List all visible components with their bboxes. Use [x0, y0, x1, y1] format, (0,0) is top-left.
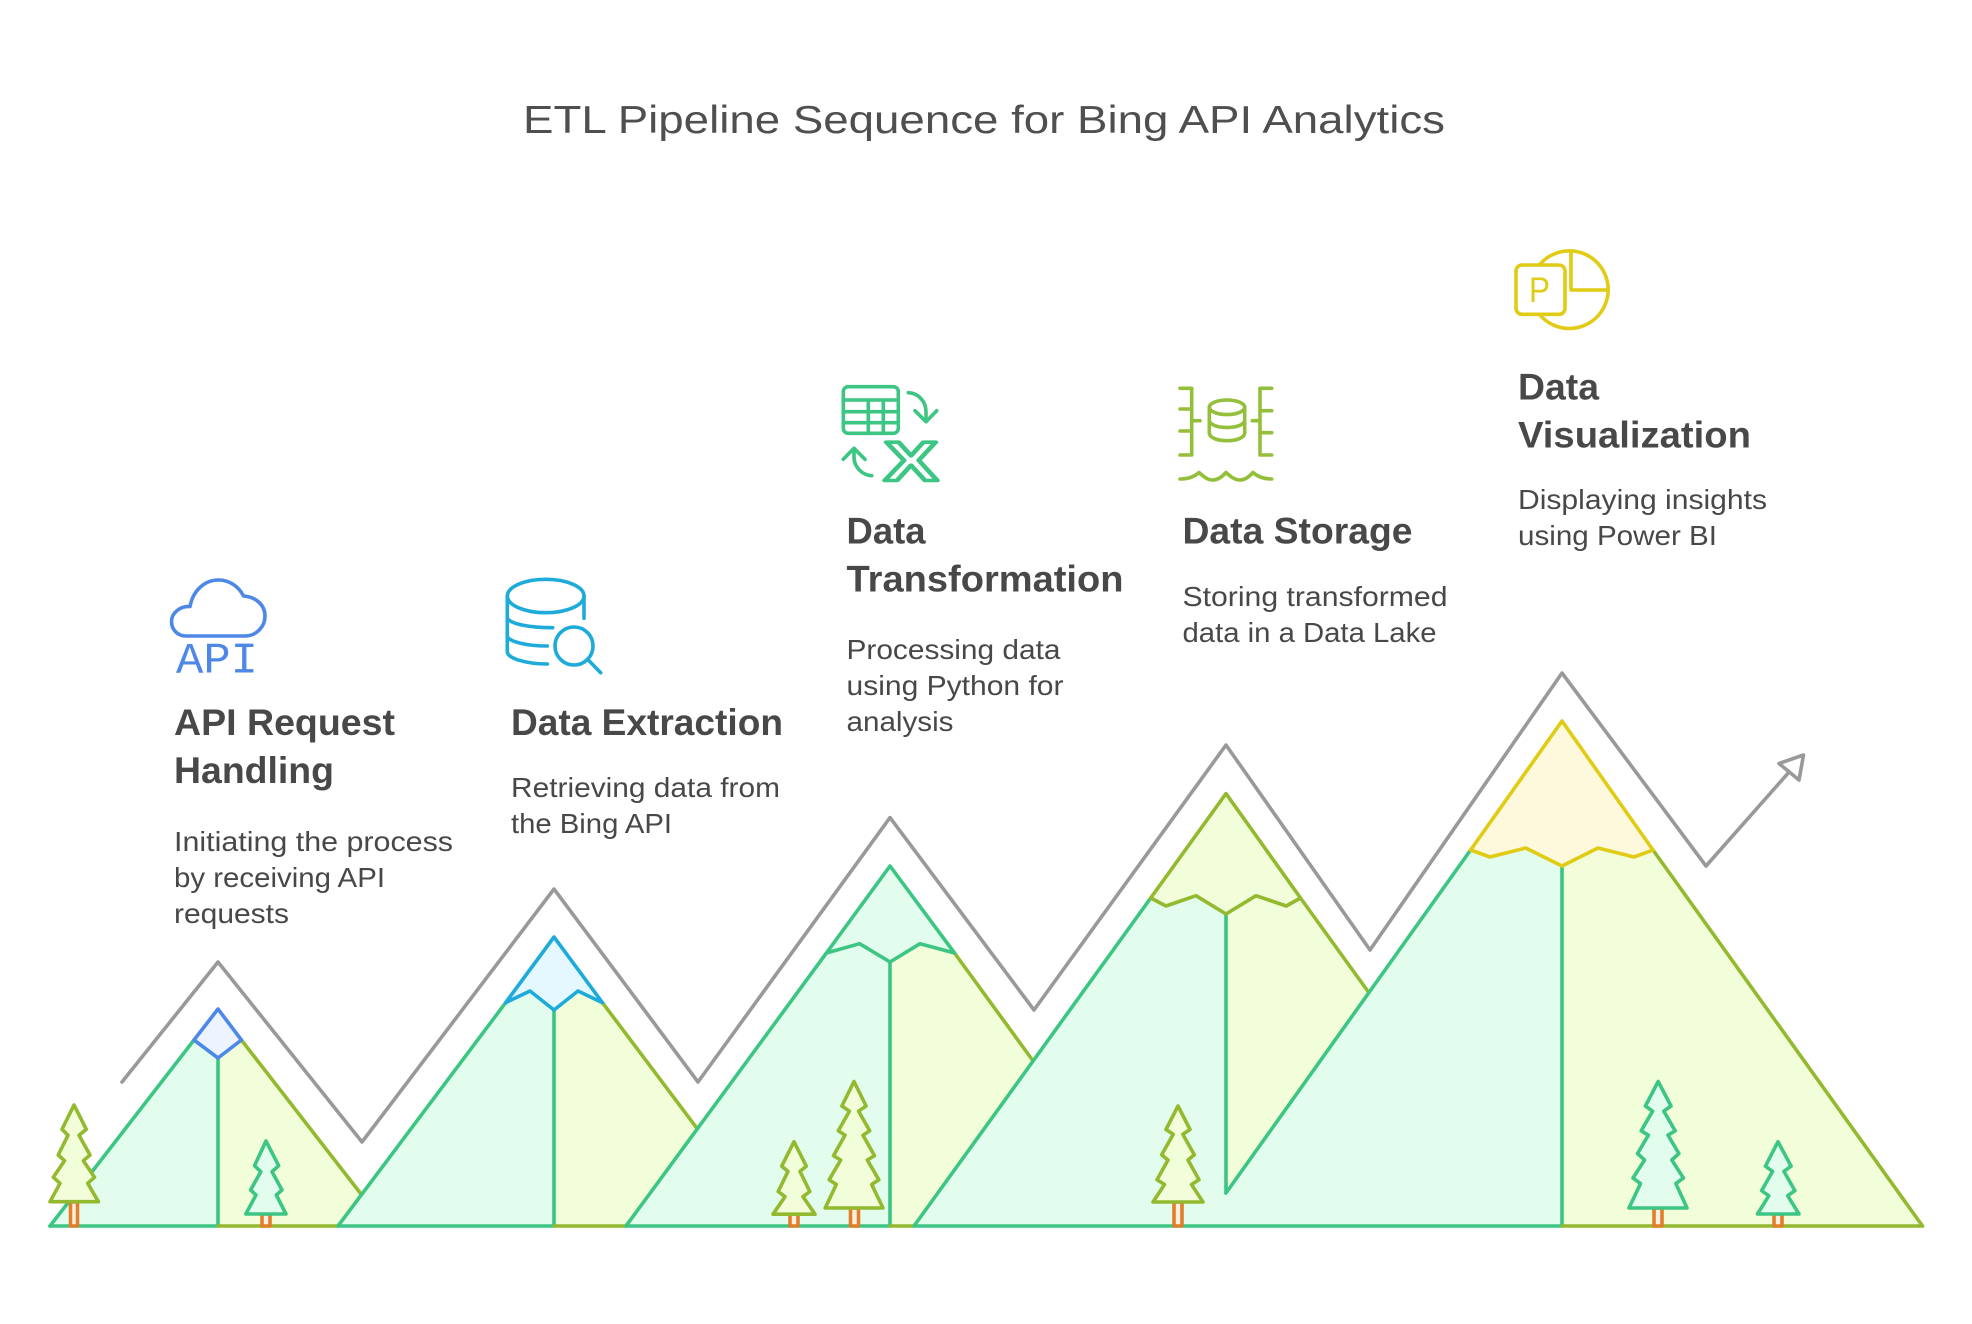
step 2: Data Extraction [507, 579, 783, 839]
title: ETL Pipeline Sequence for Bing API Analytics [523, 99, 1445, 142]
description: data in a Data Lake [1182, 617, 1436, 648]
description: Processing data [846, 634, 1061, 665]
icon: database search [507, 579, 601, 673]
description [846, 634, 1064, 737]
mountain 5 [1226, 721, 1922, 1226]
heading [1518, 366, 1751, 456]
icon: table to Excel [843, 387, 938, 492]
heading [174, 702, 395, 791]
description [1182, 581, 1448, 648]
mountain 2 [338, 937, 770, 1226]
tree 3 [773, 1142, 815, 1226]
description [511, 772, 780, 839]
description [1518, 484, 1767, 551]
description: the Bing API [511, 808, 672, 839]
description: using Power BI [1518, 520, 1717, 551]
description: using Python for [846, 670, 1064, 701]
heading [846, 510, 1124, 600]
description [174, 826, 453, 929]
mountain 3 [626, 866, 1153, 1226]
description: by receiving API [174, 862, 385, 893]
heading: Visualization [1518, 414, 1751, 456]
icon: PowerPoint chart: P [1529, 271, 1550, 310]
heading: Data [846, 510, 926, 552]
mountain 1 [50, 1009, 386, 1226]
tree 2 [246, 1141, 286, 1226]
heading: Handling [174, 750, 334, 791]
description: Displaying insights [1518, 484, 1767, 515]
description: requests [174, 898, 289, 929]
tree 4 [825, 1082, 883, 1226]
tree 5 [1153, 1106, 1203, 1226]
heading: Data Storage [1182, 510, 1412, 552]
description: Initiating the process [174, 826, 453, 857]
icon: table to Excel: X [884, 430, 938, 492]
step 5: Data Visualization [1516, 251, 1767, 551]
description: Storing transformed [1182, 581, 1448, 612]
description: analysis [846, 706, 954, 737]
arrow: zigzag progress line [122, 673, 1804, 1142]
icon: cloud API [172, 580, 265, 686]
step 1: API Request Handling [172, 580, 453, 929]
tree 7 [1758, 1142, 1799, 1226]
icon: data lake [1180, 388, 1272, 480]
tree 1 [50, 1105, 98, 1226]
mountain 4 [914, 794, 1368, 1226]
icon: cloud API: API [176, 636, 258, 686]
heading: API Request [174, 702, 395, 743]
heading: Data [1518, 366, 1599, 408]
icon: PowerPoint chart [1516, 251, 1608, 328]
tree 6 [1629, 1082, 1687, 1226]
heading: Data Extraction [511, 702, 783, 743]
heading: Transformation [846, 558, 1124, 600]
ground line [50, 1224, 1922, 1228]
step 3: Data Transformation [843, 387, 1124, 737]
description: Retrieving data from [511, 772, 780, 803]
step 4: Data Storage [1180, 388, 1448, 648]
